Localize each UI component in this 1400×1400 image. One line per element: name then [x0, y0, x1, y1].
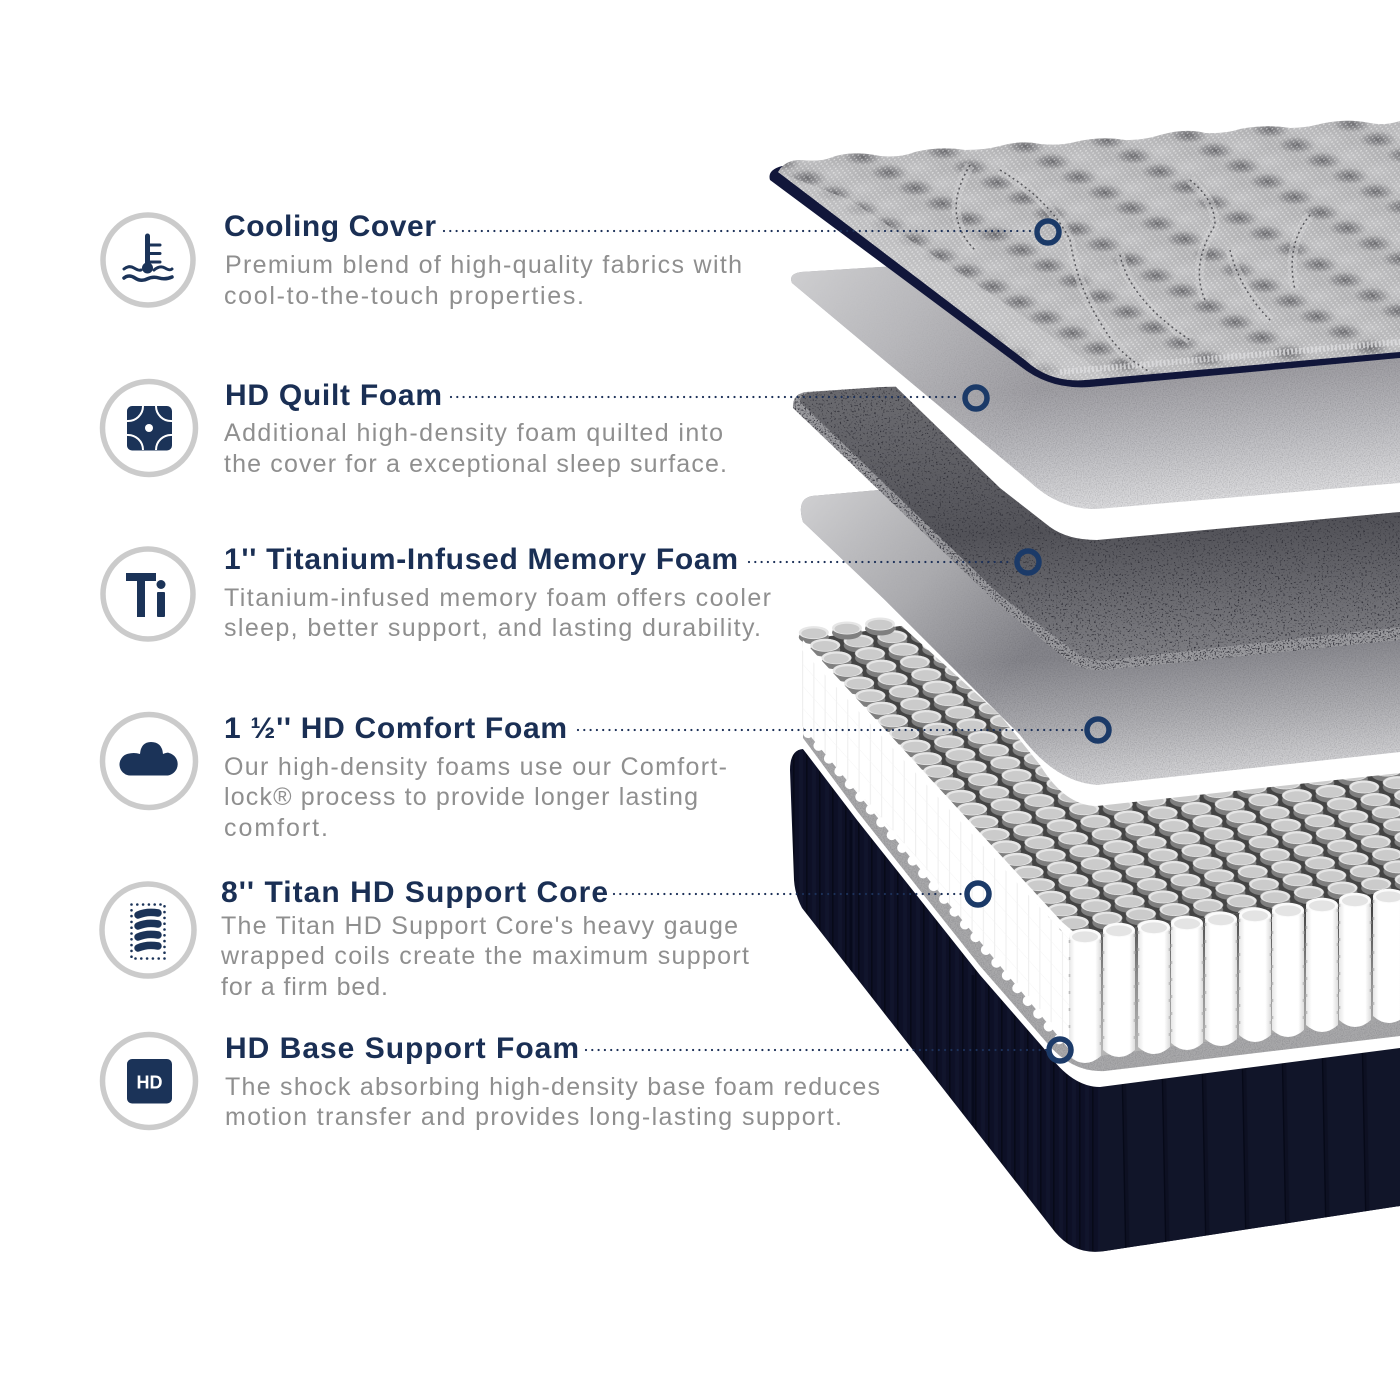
base foam white top	[800, 720, 1400, 1087]
base foam navy cover	[790, 749, 1400, 1270]
text block: Cooling Cover: Cooling Cover	[224, 210, 436, 243]
text block: HD Comfort Foam: lock® process to provide longer lasting	[224, 783, 698, 811]
text block: HD Base Support Foam: motion transfer and provides long-lasting support.	[225, 1103, 842, 1131]
text block: HD Comfort Foam	[224, 712, 727, 842]
text block: Titan HD Support Core: for a firm bed.	[221, 973, 388, 1001]
icon: HD badge	[102, 1034, 196, 1128]
text block: HD Quilt Foam: HD Quilt Foam	[225, 379, 442, 412]
leader line: HD Quilt Foam	[451, 387, 987, 409]
text block: Titanium-Infused Memory Foam: sleep, better support, and lasting durability.	[224, 614, 761, 642]
text block: Cooling Cover: Premium blend of high-quality fabrics with	[225, 251, 742, 279]
text block: Titanium-Infused Memory Foam: 1'' Titanium-Infused Memory Foam	[224, 543, 738, 576]
icon: wrapped coil	[102, 884, 194, 976]
leader line: Titanium Memory Foam	[749, 551, 1039, 573]
text block: HD Base Support Foam: The shock absorbing high-density base foam reduces	[225, 1073, 880, 1101]
leader line: Support Core	[614, 883, 989, 905]
leader line: Cooling Cover	[444, 221, 1059, 243]
icon: Ti element	[103, 549, 193, 639]
text block: Cooling Cover: cool-to-the-touch properties.	[224, 282, 584, 310]
text block: Titan HD Support Core	[220, 876, 749, 1001]
text block: Titan HD Support Core: The Titan HD Support Core's heavy gauge	[221, 912, 738, 940]
text block: HD Quilt Foam: the cover for a exceptional sleep surface.	[224, 450, 727, 478]
icon: HD badge: HD	[136, 1072, 162, 1092]
text block: HD Comfort Foam: Our high-density foams use our Comfort-	[224, 753, 727, 781]
support core coils	[799, 600, 1400, 1063]
icon: thermometer over water	[103, 215, 193, 305]
text block: HD Comfort Foam: 1 ½'' HD Comfort Foam	[224, 712, 567, 745]
leader line: Base Support Foam	[586, 1039, 1071, 1061]
text block: HD Base Support Foam: HD Base Support Foam	[225, 1032, 579, 1065]
text block: Cooling Cover	[224, 210, 742, 310]
text block: HD Quilt Foam: Additional high-density foam quilted into	[224, 419, 723, 447]
HD quilt foam layer	[789, 250, 1400, 540]
leader line: HD Comfort Foam	[578, 719, 1109, 741]
cooling cover quilted top	[770, 110, 1400, 390]
text block: HD Comfort Foam: comfort.	[224, 814, 328, 842]
text block: HD Base Support Foam	[225, 1032, 880, 1131]
text block: Titan HD Support Core: 8'' Titan HD Support Core	[221, 876, 608, 909]
icon: cloud	[102, 714, 196, 808]
mattress illustration	[770, 110, 1400, 1270]
comfort foam layer	[797, 480, 1400, 806]
text block: HD Quilt Foam	[224, 379, 727, 478]
titanium memory foam layer	[793, 380, 1400, 670]
text block: Titanium-Infused Memory Foam	[224, 543, 771, 642]
text block: Titanium-Infused Memory Foam: Titanium-infused memory foam offers cooler	[224, 584, 771, 612]
text block: Titan HD Support Core: wrapped coils create the maximum support	[220, 942, 749, 970]
icon: quilt square	[102, 382, 196, 474]
